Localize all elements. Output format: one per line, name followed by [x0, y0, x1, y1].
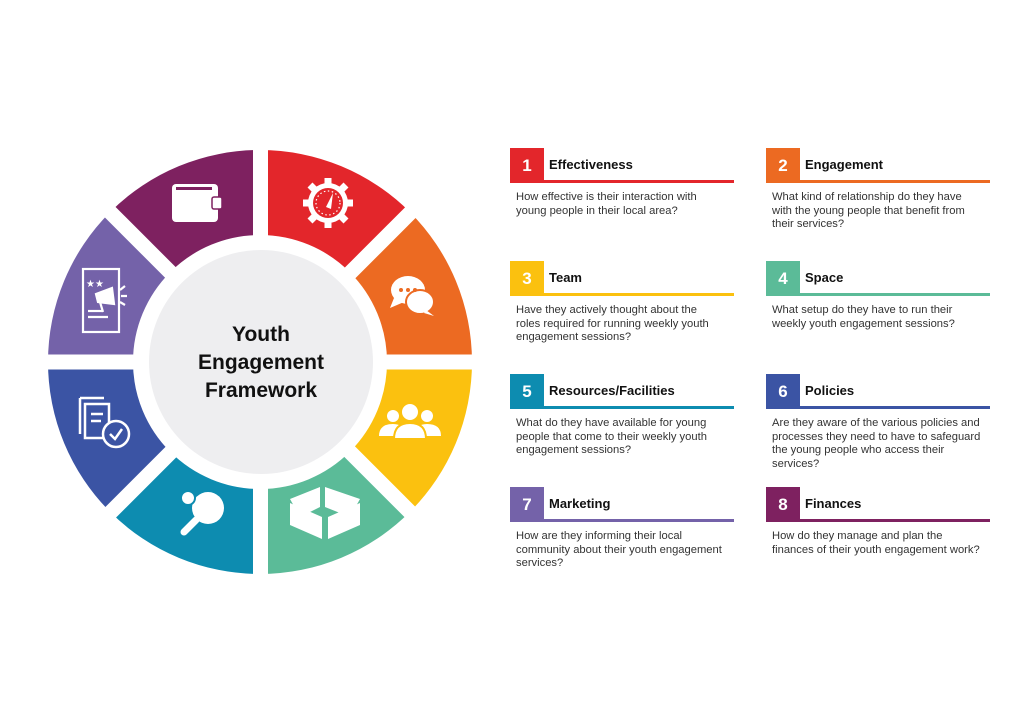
- item 4: [766, 261, 990, 330]
- item 5: What do they have available for young: [516, 417, 706, 429]
- item 8: [766, 487, 990, 556]
- item 6: Are they aware of the various policies and: [772, 417, 980, 429]
- item 1: young people in their local area?: [516, 205, 678, 217]
- segment 4 green space: [260, 452, 410, 574]
- center circle: Youth: [232, 323, 290, 346]
- segment 2 orange engagement: [350, 212, 472, 362]
- item 7: 7: [522, 495, 532, 514]
- item 6: 6: [778, 382, 788, 401]
- item 7: community about their youth engagement: [516, 544, 722, 556]
- segment 7 lavender marketing: [48, 212, 170, 362]
- item 3: 3: [522, 269, 532, 288]
- item 1: 1: [522, 156, 532, 175]
- item 1: [510, 148, 734, 217]
- item 6: Policies: [805, 383, 854, 398]
- item 3: [510, 261, 734, 343]
- item 6: the young people who access their: [772, 444, 944, 456]
- item 7: services?: [516, 557, 563, 569]
- item 8: How do they manage and plan the: [772, 530, 942, 542]
- center circle: Engagement: [198, 351, 324, 374]
- item 5: people that come to their weekly youth: [516, 431, 707, 443]
- item 5: 5: [522, 382, 532, 401]
- item 2: Engagement: [805, 157, 883, 172]
- item 4: 4: [778, 269, 788, 288]
- item 2: [766, 148, 990, 230]
- center circle: Framework: [205, 379, 317, 402]
- item 5: Resources/Facilities: [549, 383, 675, 398]
- segment 1 red effectiveness: [260, 150, 410, 272]
- item 7: Marketing: [549, 496, 610, 511]
- item 2: 2: [778, 156, 788, 175]
- item 3: roles required for running weekly youth: [516, 318, 709, 330]
- item 6: [766, 374, 990, 470]
- item 5: [510, 374, 734, 456]
- item 6: processes they need to have to safeguard: [772, 431, 980, 443]
- item 8: 8: [778, 495, 788, 514]
- item 3: Have they actively thought about the: [516, 304, 697, 316]
- item 8: Finances: [805, 496, 861, 511]
- segment 7 lavender marketing: ★★: [86, 279, 104, 290]
- segment 5 teal resources: [110, 452, 260, 574]
- item 2: What kind of relationship do they have: [772, 191, 962, 203]
- item 2: with the young people that benefit from: [772, 205, 965, 217]
- item 4: weekly youth engagement sessions?: [772, 318, 955, 330]
- item 3: engagement sessions?: [516, 331, 631, 343]
- item 1: Effectiveness: [549, 157, 633, 172]
- item 2: their services?: [772, 218, 844, 230]
- item 4: Space: [805, 270, 843, 285]
- item 7: [510, 487, 734, 569]
- item 7: How are they informing their local: [516, 530, 682, 542]
- segment 3 yellow team: [350, 362, 472, 512]
- segment 8 plum finances: [110, 150, 260, 272]
- item 3: Team: [549, 270, 582, 285]
- item 8: finances of their youth engagement work?: [772, 544, 980, 556]
- segment 6 blue policies: [48, 362, 170, 512]
- item 5: engagement sessions?: [516, 444, 631, 456]
- center circle: [149, 250, 373, 474]
- item 4: What setup do they have to run their: [772, 304, 952, 316]
- item 1: How effective is their interaction with: [516, 191, 697, 203]
- item 6: services?: [772, 458, 819, 470]
